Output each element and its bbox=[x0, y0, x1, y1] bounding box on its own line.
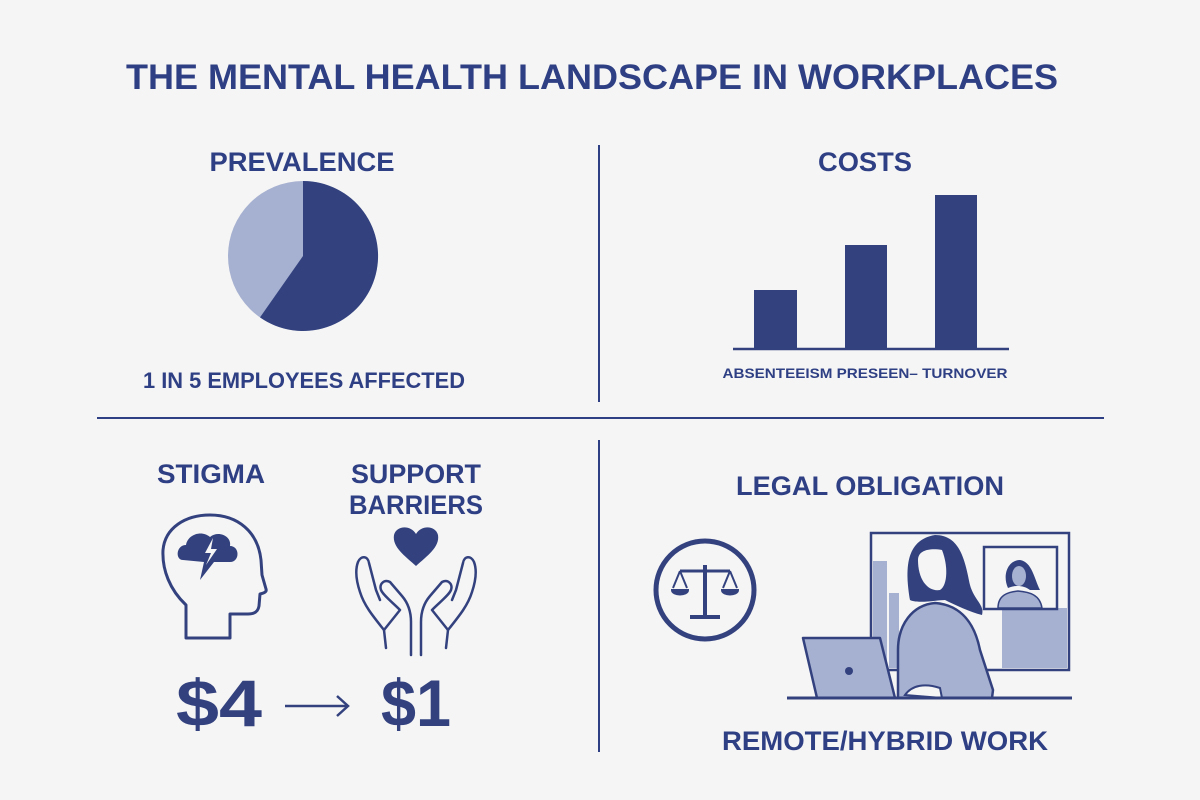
bar labels: ABSENTEEISM PRESEEN– TURNOVER bbox=[722, 365, 1008, 381]
panel: stigma and support bbox=[157, 459, 483, 740]
icon: head with storm cloud bbox=[163, 515, 266, 638]
stat: $4: $4 bbox=[176, 666, 262, 740]
panel: prevalence bbox=[143, 147, 465, 393]
caption: remote/hybrid work: REMOTE/HYBRID WORK bbox=[722, 726, 1049, 756]
title: THE MENTAL HEALTH LANDSCAPE IN WORKPLACES bbox=[126, 58, 1058, 97]
heading: support barriers: SUPPORT bbox=[351, 459, 481, 489]
panel: legal obligation bbox=[656, 471, 1072, 756]
icon: hands with heart bbox=[356, 527, 476, 655]
caption: 1 in 5: 1 IN 5 EMPLOYEES AFFECTED bbox=[143, 368, 465, 393]
pie chart bbox=[228, 181, 378, 331]
icon: scales of justice bbox=[656, 541, 754, 639]
heading: stigma: STIGMA bbox=[157, 459, 265, 489]
panel: costs bbox=[722, 147, 1009, 381]
panel: stigma and support: BARRIERS bbox=[349, 490, 483, 520]
heading: legal obligation: LEGAL OBLIGATION bbox=[736, 471, 1004, 501]
illustration: remote work bbox=[787, 533, 1072, 698]
stat: $1: $1 bbox=[381, 666, 451, 740]
heading: prevalence: PREVALENCE bbox=[210, 147, 394, 177]
arrow bbox=[285, 696, 348, 716]
heading: costs: COSTS bbox=[818, 147, 912, 177]
bar chart bbox=[733, 195, 1009, 349]
